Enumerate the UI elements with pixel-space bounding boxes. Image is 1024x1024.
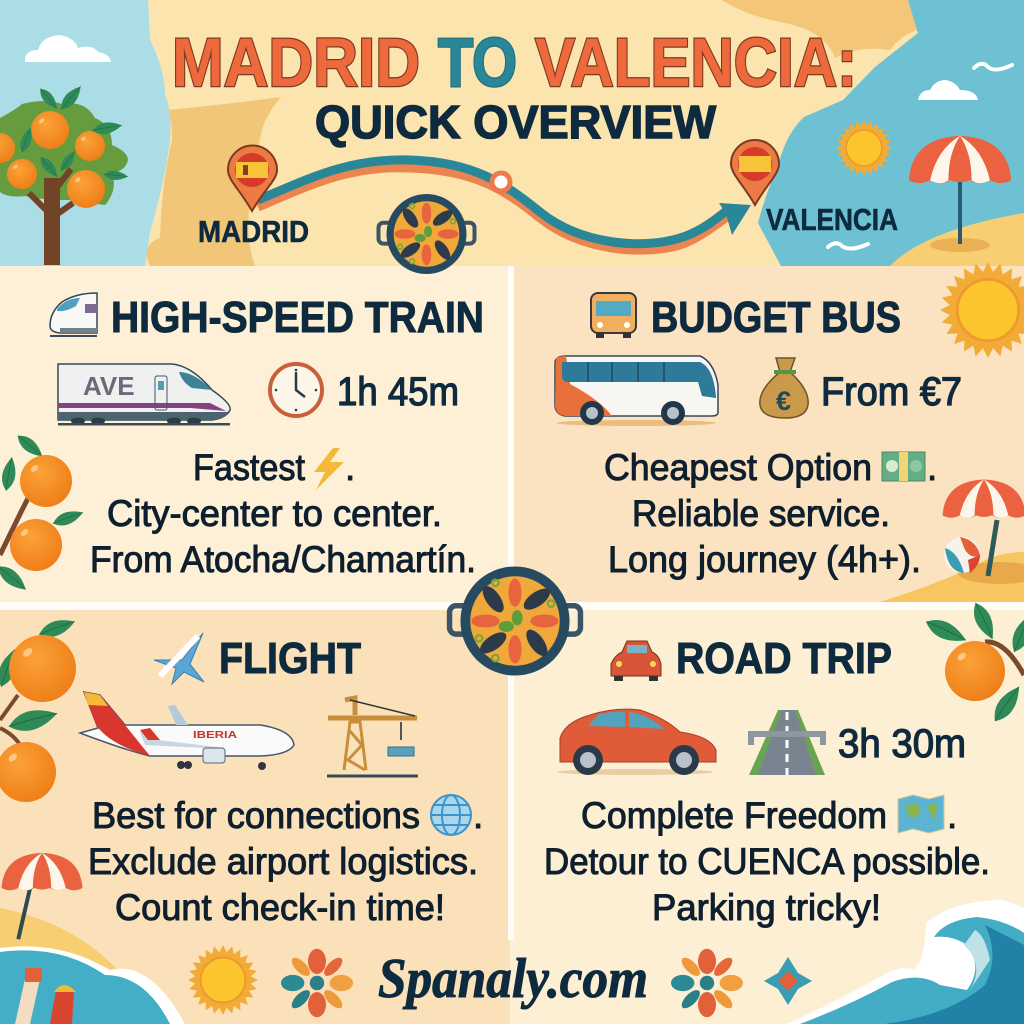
panel: flight — [0, 610, 510, 1024]
bullet text — [88, 795, 483, 928]
icon: header paella — [378, 194, 474, 274]
center paella — [450, 566, 580, 676]
bullet text: Long journey (4h+). — [608, 539, 921, 580]
title: MADRID — [172, 24, 420, 101]
footer flower right — [671, 949, 743, 1017]
heading: ROAD TRIP — [676, 634, 892, 683]
bullet text — [604, 447, 937, 580]
icon: small bus — [591, 293, 636, 338]
icon: header sun — [830, 114, 898, 182]
decoration: orange top right of road trip — [923, 600, 1024, 726]
illustration: AVE train: AVE — [83, 371, 135, 401]
bullet text: . — [345, 447, 355, 488]
icon: Madrid pin — [228, 146, 277, 211]
bullet text — [90, 447, 476, 580]
icon: wavelets — [828, 64, 1012, 249]
section: road trip — [544, 634, 990, 928]
panel: road trip — [510, 610, 1024, 1024]
decoration: oranges left of flight panel — [0, 615, 77, 802]
decoration: oranges left of train panel — [0, 431, 85, 595]
panel dividers — [0, 266, 1024, 940]
bullet text: From Atocha/Chamartín. — [90, 539, 476, 580]
panel: budget bus — [514, 266, 1024, 602]
bullet text — [544, 795, 990, 928]
bullet text: Detour to CUENCA possible. — [544, 841, 990, 882]
icon: euro money bag — [760, 358, 808, 418]
heading: BUDGET BUS — [651, 293, 901, 342]
price: From €7 — [821, 370, 962, 414]
label: Madrid: MADRID — [198, 214, 309, 249]
bullet text: Count check-in time! — [115, 887, 445, 928]
icon: clock — [270, 364, 322, 416]
decoration: sun top right — [929, 251, 1024, 369]
bullet text: . — [947, 795, 957, 836]
label: Valencia: VALENCIA — [766, 202, 898, 237]
bullet text: Reliable service. — [632, 493, 890, 534]
brand wordmark: Spanaly.com — [378, 948, 648, 1010]
duration: 3h 30m — [838, 722, 966, 766]
bullet text: Cheapest Option — [604, 447, 872, 488]
bullet text: Parking tricky! — [652, 887, 881, 928]
bullet text: . — [927, 447, 937, 488]
title: TO — [438, 24, 517, 101]
icon: euro money bag: € — [776, 386, 791, 416]
section: budget bus — [555, 293, 962, 580]
footer flower left — [281, 949, 353, 1017]
heading: FLIGHT — [219, 634, 361, 683]
section: flight — [80, 633, 483, 928]
title — [172, 24, 857, 101]
header background map — [0, 0, 1024, 266]
icon: crane — [327, 698, 418, 776]
cloud: top right — [918, 80, 978, 100]
illustration: Iberia plane: IBERIA — [193, 730, 237, 741]
footer star icon — [764, 957, 812, 1005]
icon: banknotes — [882, 452, 925, 481]
illustration: Iberia plane — [80, 692, 294, 770]
bullet text: Best for connections — [92, 795, 420, 836]
icon: small airplane — [154, 633, 204, 684]
illustration: red car — [557, 709, 716, 775]
cloud: top left — [25, 35, 111, 62]
icon: map — [898, 795, 944, 833]
icon: small train — [50, 293, 97, 337]
route arrow — [258, 160, 751, 250]
subtitle: QUICK OVERVIEW — [315, 96, 717, 148]
illustration: coach bus — [555, 356, 718, 426]
decoration: wave bottom right — [787, 900, 1024, 1024]
icon: globe — [431, 795, 471, 835]
icon: lightning — [314, 448, 344, 490]
icon: header umbrella — [909, 136, 1011, 252]
footer sun icon — [180, 937, 266, 1023]
bullet text: Exclude airport logistics. — [88, 841, 478, 882]
decoration: beach and sea bottom left — [0, 853, 185, 1024]
icon: small car — [611, 641, 661, 681]
title: VALENCIA: — [535, 24, 857, 101]
section: high-speed train — [50, 293, 484, 580]
heading: HIGH-SPEED TRAIN — [111, 293, 484, 342]
panel: high-speed train — [0, 266, 508, 602]
bullet text: Complete Freedom — [581, 795, 887, 836]
icon: highway — [749, 710, 825, 775]
bullet text: City-center to center. — [107, 493, 442, 534]
bullet text: . — [473, 795, 483, 836]
decoration: beach right — [880, 479, 1024, 602]
icon: Valencia pin — [731, 140, 779, 205]
icon: orange tree — [0, 83, 128, 265]
duration: 1h 45m — [337, 370, 459, 414]
bullet text: Fastest — [193, 447, 306, 488]
illustration: AVE train — [58, 364, 230, 426]
